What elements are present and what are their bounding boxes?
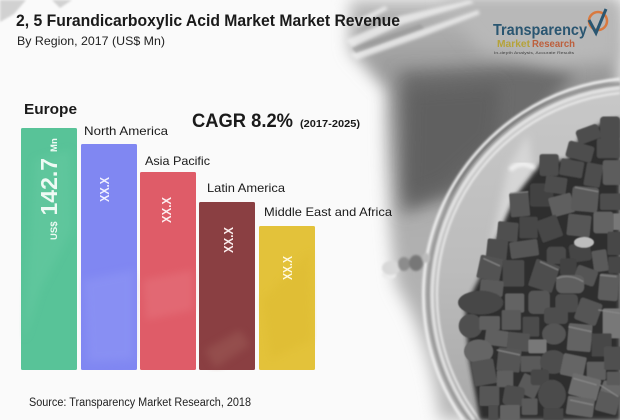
source note: Source: Transparency Market Research, 2018	[29, 397, 251, 409]
Latin America value: XX.X	[221, 227, 236, 253]
logo Research: Research	[532, 38, 575, 50]
logo icon: check in ring	[589, 9, 607, 33]
Europe label: Europe	[24, 102, 77, 118]
Middle East and Africa label: Middle East and Africa	[264, 205, 392, 219]
bar: North America	[81, 124, 168, 370]
North America label: North America	[84, 124, 168, 138]
logo tagline: In-depth Analysis, Accurate Results	[494, 50, 574, 55]
logo: Transparency Market Research	[493, 9, 607, 55]
Latin America label: Latin America	[207, 181, 285, 195]
logo Market: Market	[497, 38, 530, 50]
bar: Europe	[21, 102, 77, 370]
title: 2, 5 Furandicarboxylic Acid Market Market Revenue	[16, 12, 400, 30]
CAGR callout: CAGR 8.2%	[192, 111, 293, 132]
CAGR callout	[192, 111, 360, 132]
Middle East and Africa value: XX.X	[280, 256, 295, 280]
North America value: XX.X	[97, 177, 112, 202]
Asia Pacific label: Asia Pacific	[145, 154, 210, 168]
bar chart: revenue by region	[21, 102, 392, 370]
logo wordmark: Transparency	[493, 22, 587, 39]
bar: Asia Pacific	[140, 154, 210, 370]
bar: Middle East and Africa	[259, 205, 392, 370]
subtitle: By Region, 2017 (US$ Mn)	[17, 34, 165, 48]
Asia Pacific value: XX.X	[159, 197, 174, 223]
CAGR callout: (2017-2025)	[300, 118, 360, 130]
Europe value: US$142.7Mn	[36, 138, 62, 240]
bar: Latin America	[199, 181, 285, 370]
